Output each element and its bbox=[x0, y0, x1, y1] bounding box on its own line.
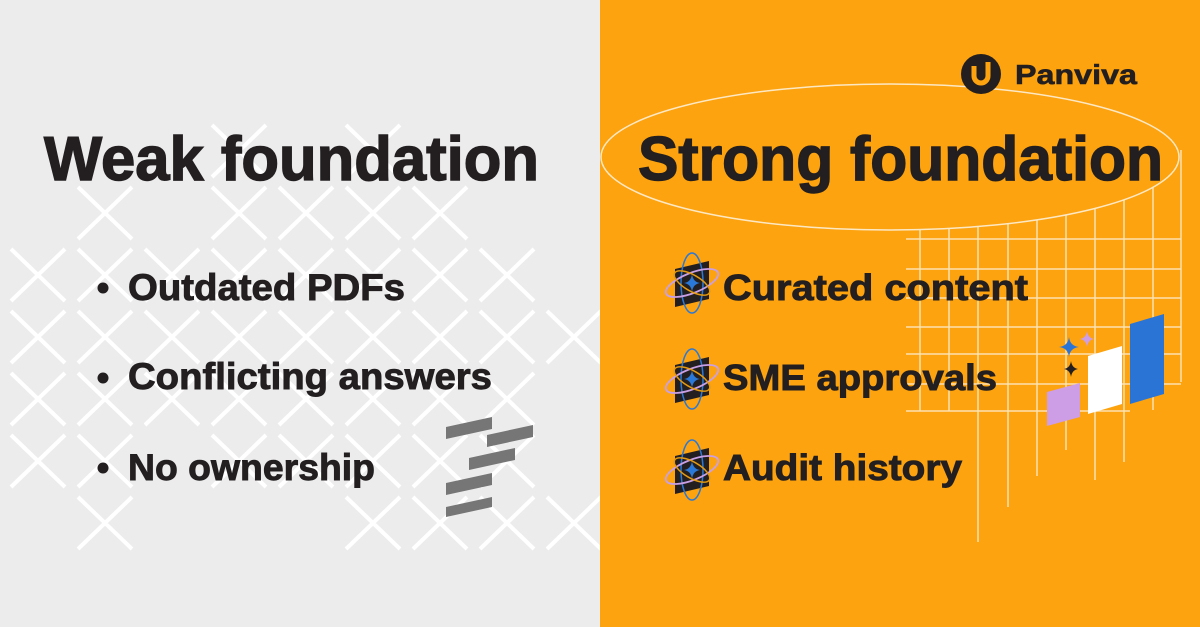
bullet item: no ownership: No ownership bbox=[128, 447, 375, 488]
item: SME approvals: SME approvals bbox=[723, 357, 997, 398]
bullet item: conflicting answers: Conflicting answers bbox=[128, 356, 492, 397]
item: audit history: Audit history bbox=[723, 447, 962, 488]
icon: orbit document bbox=[662, 253, 722, 313]
list: strong points bbox=[662, 253, 1028, 500]
item: SME approvals bbox=[662, 349, 997, 409]
icon: orbit document bbox=[662, 440, 722, 500]
panel: weak foundation background bbox=[0, 0, 600, 627]
grid decoration bbox=[906, 150, 1181, 542]
chart: rising bars with sparkles bbox=[1047, 314, 1164, 426]
title: strong foundation: Strong foundation bbox=[638, 125, 1163, 194]
panel: strong foundation background bbox=[600, 0, 1200, 627]
icon: broken gray bars bbox=[446, 417, 533, 517]
title: weak foundation: Weak foundation bbox=[44, 125, 539, 194]
item: audit history bbox=[662, 440, 962, 500]
logo: Panviva: Panviva bbox=[1015, 59, 1137, 90]
bullet item: outdated PDFs: Outdated PDFs bbox=[128, 267, 405, 308]
icon: orbit document bbox=[662, 349, 722, 409]
item: curated content bbox=[662, 253, 1028, 313]
list: weak points bbox=[98, 267, 492, 488]
ellipse outline around title bbox=[601, 84, 1179, 230]
logo: Panviva bbox=[961, 54, 1137, 94]
item: curated content: Curated content bbox=[723, 267, 1028, 308]
